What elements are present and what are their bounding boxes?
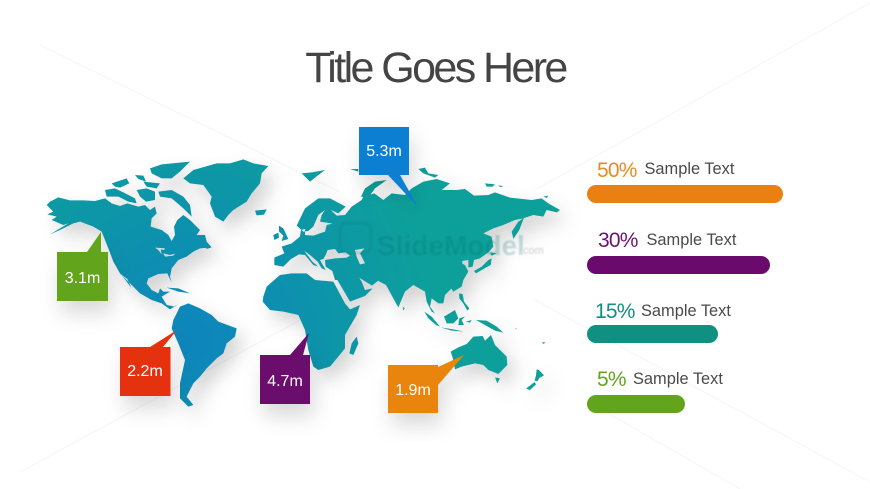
watermark: .com [520, 245, 544, 257]
north america [47, 162, 212, 309]
mainland [47, 197, 212, 309]
stat row: 15% [587, 300, 731, 343]
south america [172, 303, 237, 407]
mainland [380, 179, 560, 292]
callout: asia [359, 127, 418, 207]
callout: africa: 4.7m [267, 373, 303, 390]
callout: north america: 3.1m [65, 270, 100, 287]
callout: south america: 2.2m [127, 363, 163, 380]
stat row: 5%: Sample Text [633, 370, 723, 388]
mainland [274, 193, 405, 286]
stat row: 50% [587, 159, 783, 203]
south asia and oceania [370, 250, 545, 390]
caribbean islands [167, 288, 190, 293]
iceland [255, 209, 267, 215]
callout: australia [388, 355, 464, 413]
stat row: 5%: 5% [597, 368, 626, 391]
islands [418, 168, 548, 287]
northern and eastern asia [380, 168, 560, 292]
callout: australia: 1.9m [395, 382, 431, 399]
australia [451, 335, 507, 383]
south america and greenland [167, 159, 268, 407]
stat row: 30%: 30% [598, 229, 638, 252]
stat row: 30%: Sample Text [646, 231, 737, 249]
title: Title Goes Here [305, 44, 566, 92]
europe and west asia [273, 169, 405, 286]
stat row: 15%: Sample Text [641, 302, 731, 320]
callout: asia: 5.3m [366, 143, 402, 160]
madagascar [349, 337, 358, 355]
stat row: 15%: 15% [595, 300, 635, 323]
stat row: 50%: 50% [597, 159, 637, 182]
africa and arabia [263, 273, 373, 370]
callout: north america [57, 232, 108, 301]
greenland [183, 159, 268, 222]
stat row: 30% [587, 229, 770, 274]
indonesia and philippines [403, 293, 545, 344]
new zealand [526, 369, 544, 390]
islands [273, 169, 387, 241]
arabia [335, 273, 373, 302]
world map [47, 159, 560, 407]
watermark [340, 223, 544, 261]
stat row: 50%: Sample Text [644, 160, 735, 178]
watermark: SlideModel [377, 230, 525, 261]
callout: africa [260, 333, 310, 404]
africa [263, 273, 360, 370]
arctic islands [105, 162, 212, 249]
stat row: 5% [587, 368, 723, 413]
south asia [370, 250, 463, 313]
callout: south america [120, 330, 177, 396]
